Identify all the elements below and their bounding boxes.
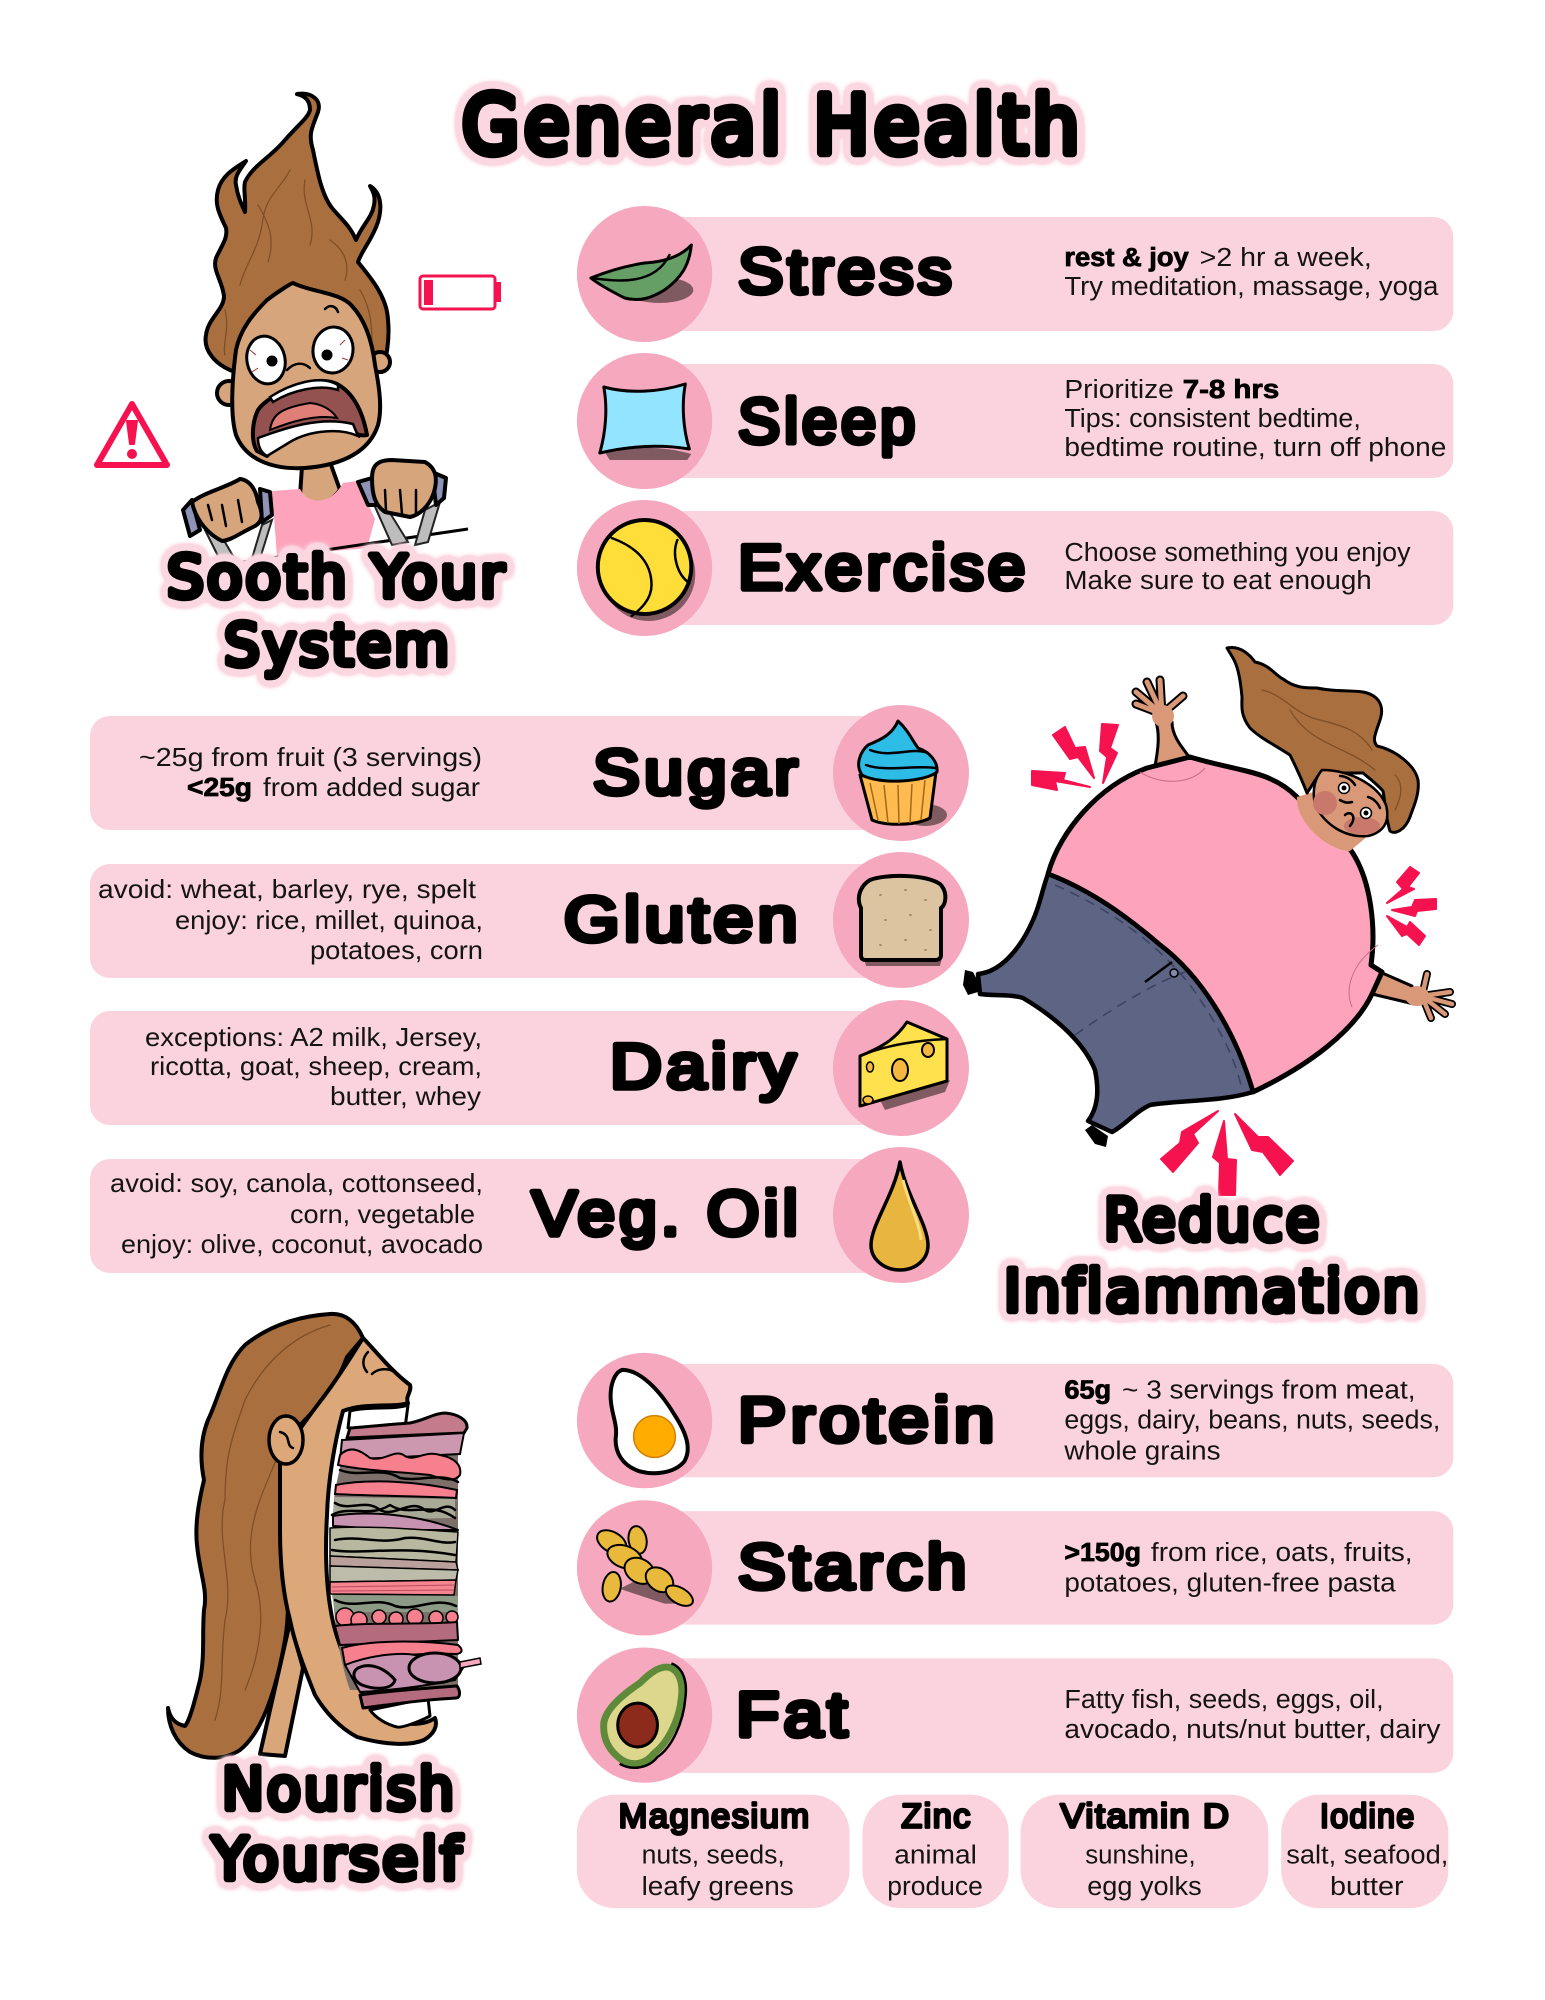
details: exceptions: A2 milk, Jersey, [145, 1022, 482, 1052]
right arm and hand [1372, 972, 1452, 1018]
details: ricotta, goat, sheep, cream, [150, 1051, 482, 1081]
resistance band grips [183, 472, 446, 570]
face [232, 283, 380, 468]
details [1064, 376, 1446, 462]
details: Try meditation, massage, yoga [1064, 273, 1439, 301]
label: Starch [738, 1533, 971, 1603]
details: avocado, nuts/nut butter, dairy [1064, 1716, 1440, 1744]
heading: Sooth Your System [167, 543, 507, 679]
hair strands [215, 1325, 330, 1720]
details [1064, 1539, 1413, 1598]
label: Sleep [738, 387, 919, 457]
label: Fat [736, 1680, 851, 1750]
panel: fat [577, 1647, 1453, 1783]
details: >150g [1064, 1539, 1141, 1567]
title: General Health [462, 79, 1084, 172]
details: avoid: soy, canola, cottonseed, [110, 1168, 483, 1198]
heading: Reduce Inflammation [1004, 1186, 1422, 1325]
eye and ear [269, 1352, 395, 1464]
details: ~25g from fruit (3 servings) [139, 742, 482, 772]
details [145, 1022, 482, 1111]
details: from added sugar [263, 772, 480, 802]
raised arm and hand [1136, 680, 1190, 766]
illustration: stressed character [97, 94, 501, 570]
details: enjoy: rice, millet, quinoa, [175, 905, 483, 935]
icon: avocado [604, 1663, 686, 1768]
icon: leaf [591, 245, 693, 303]
icon: bread slice [859, 876, 945, 966]
panel: zinc: produce [887, 1873, 983, 1901]
hair [1227, 647, 1418, 832]
icon: warning triangle [97, 404, 167, 465]
label: Sugar [593, 738, 802, 808]
details: avoid: wheat, barley, rye, spelt [98, 874, 477, 904]
panel: vitamin D: Vitamin D [1060, 1798, 1230, 1836]
panel: zinc: Zinc [901, 1798, 972, 1836]
details: >2 hr a week, [1200, 244, 1372, 272]
panel: sleep [577, 353, 1453, 489]
icon: pasta [593, 1525, 696, 1610]
label: Gluten [564, 885, 802, 955]
details: potatoes, gluten-free pasta [1064, 1570, 1396, 1598]
details: 65g [1064, 1377, 1111, 1405]
shoes [963, 970, 1108, 1147]
details [110, 1168, 483, 1259]
face and jaw [280, 1338, 436, 1744]
jeans [978, 874, 1253, 1132]
icon: fried egg [611, 1370, 688, 1473]
details: bedtime routine, turn off phone [1064, 434, 1446, 462]
icon: cupcake [859, 721, 947, 826]
neck [1297, 790, 1375, 851]
label: Dairy [610, 1032, 800, 1102]
icon: low battery [420, 276, 501, 309]
neck and shirt [237, 462, 468, 563]
panel: sugar [90, 705, 969, 841]
panel: vitamin D [1021, 1795, 1268, 1908]
label: Stress [738, 237, 956, 307]
panel: iodine [1281, 1795, 1448, 1908]
details: ~ 3 servings from meat, [1122, 1377, 1416, 1405]
panel: magnesium [577, 1795, 849, 1908]
details: <25g [187, 772, 252, 802]
panel: vitamin D: sunshine, [1085, 1841, 1196, 1869]
heading: Reduce Inflammation: Reduce [1104, 1186, 1322, 1254]
label: Protein [738, 1385, 999, 1455]
details [1064, 244, 1439, 301]
eyes [242, 306, 356, 387]
panel: vitamin D: egg yolks [1087, 1873, 1202, 1901]
heading: Reduce Inflammation: Inflammation [1004, 1257, 1422, 1325]
icon: oil drop [871, 1162, 928, 1270]
label: Veg. Oil [532, 1179, 802, 1249]
panel: starch [577, 1500, 1453, 1636]
heading: Nourish Yourself: Yourself [211, 1825, 464, 1893]
screaming mouth [253, 380, 367, 456]
panel: stress [577, 206, 1453, 342]
details: rest & joy [1064, 244, 1189, 272]
illustration: inflated character [963, 647, 1452, 1195]
panel: vegetable oil [90, 1147, 969, 1283]
details: from rice, oats, fruits, [1151, 1539, 1413, 1567]
hair strands [224, 170, 372, 355]
panel: dairy [90, 1000, 969, 1136]
label: Exercise [738, 533, 1030, 603]
heading: Nourish Yourself: Nourish [222, 1755, 457, 1823]
neck [260, 1622, 303, 1756]
panel: exercise [577, 500, 1453, 636]
teeth [348, 1405, 430, 1727]
panel: iodine: Iodine [1320, 1798, 1416, 1836]
shirt [1048, 757, 1382, 1092]
heading: Nourish Yourself [211, 1755, 464, 1893]
details: Tips: consistent bedtime, [1064, 405, 1361, 433]
sandwich layers [330, 1413, 481, 1708]
icon: tennis ball [598, 520, 695, 621]
panel: iodine: butter [1330, 1873, 1404, 1901]
ears [217, 352, 390, 405]
illustration: character eating sandwich [168, 1314, 481, 1758]
heading: Sooth Your System: System [224, 611, 452, 679]
details: eggs, dairy, beans, nuts, seeds, [1064, 1407, 1440, 1435]
details: butter, whey [330, 1081, 481, 1111]
hair strands [1262, 690, 1401, 810]
details: potatoes, corn [310, 935, 483, 965]
details [98, 874, 483, 965]
details: Prioritize [1064, 376, 1174, 404]
panel: gluten [90, 852, 969, 988]
details: whole grains [1063, 1437, 1221, 1465]
panel: magnesium: Magnesium [619, 1798, 811, 1836]
head [1313, 770, 1387, 836]
pain bolts [1032, 724, 1436, 1195]
details [1064, 539, 1411, 595]
icon: pillow [600, 384, 691, 460]
panel: zinc: animal [894, 1841, 977, 1869]
sleeve lines [1140, 768, 1378, 1007]
details: Choose something you enjoy [1064, 539, 1411, 567]
panel: protein [577, 1353, 1453, 1488]
panel: zinc [862, 1795, 1009, 1908]
panel: magnesium: leafy greens [642, 1873, 794, 1901]
fists [192, 460, 436, 541]
details: 7-8 hrs [1183, 376, 1279, 404]
details: Make sure to eat enough [1064, 567, 1372, 595]
heading: Sooth Your System: Sooth Your [167, 543, 507, 611]
hair [168, 1314, 363, 1758]
panel: iodine: salt, seafood, [1286, 1841, 1448, 1869]
details [1064, 1686, 1440, 1744]
details [139, 742, 482, 802]
details: corn, vegetable [290, 1199, 475, 1229]
icon: cheese wedge [860, 1022, 950, 1110]
details: enjoy: olive, coconut, avocado [121, 1229, 483, 1259]
panel: magnesium: nuts, seeds, [642, 1841, 785, 1869]
hair [206, 94, 389, 372]
details [1063, 1377, 1440, 1465]
details: Fatty fish, seeds, eggs, oil, [1064, 1686, 1384, 1714]
